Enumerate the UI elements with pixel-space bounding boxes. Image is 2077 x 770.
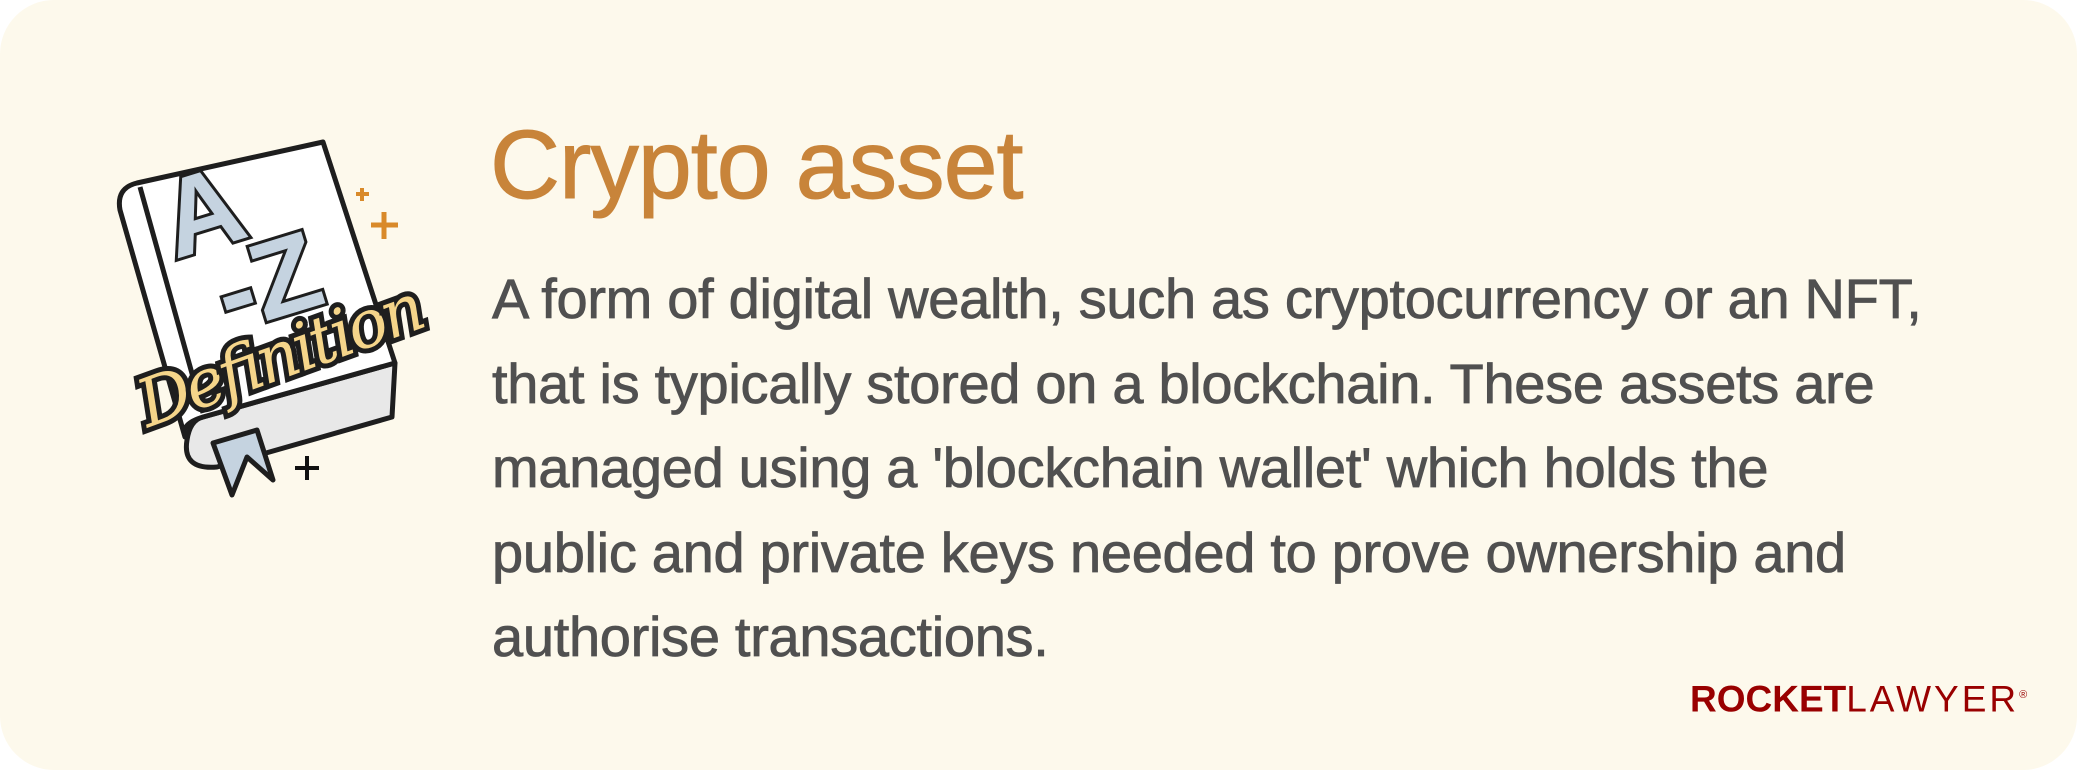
icon: definition book — [116, 140, 435, 498]
definition text — [492, 267, 1922, 668]
definition text: that is typically stored on a blockchain. These assets are — [492, 352, 1874, 414]
definition text: A form of digital wealth, such as cryptocurrency or an NFT, — [492, 267, 1922, 330]
definition text: public and private keys needed to prove ownership and — [492, 520, 1846, 584]
cover — [119, 142, 395, 437]
title: Crypto asset — [490, 110, 1022, 219]
letters A-Z: -Z — [200, 208, 335, 356]
pages block — [186, 363, 395, 467]
letters A-Z: A — [146, 141, 258, 282]
Definition script: Definition — [126, 268, 435, 443]
bookmark — [213, 430, 273, 495]
definition text: managed using a 'blockchain wallet' which holds the — [492, 436, 1768, 499]
logo: ROCKETLAWYER® — [1690, 678, 2027, 719]
sparkles — [295, 188, 398, 480]
definition text: authorise transactions. — [492, 605, 1049, 668]
letters A-Z — [146, 125, 335, 364]
